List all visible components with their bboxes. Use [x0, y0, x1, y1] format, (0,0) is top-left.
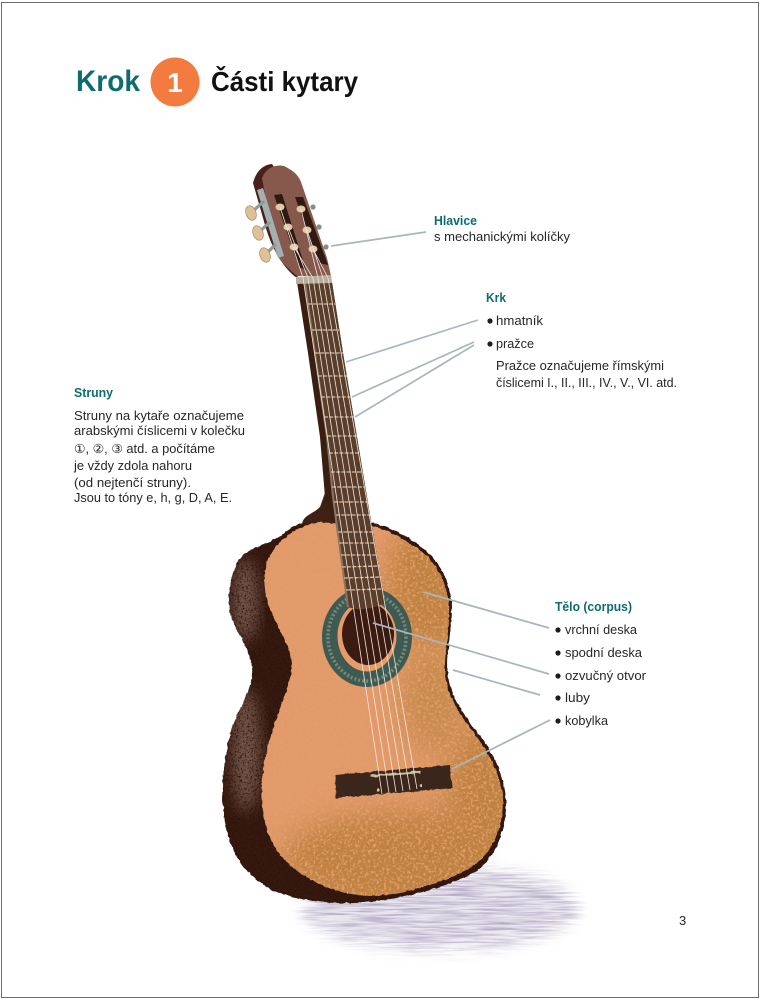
title	[76, 58, 358, 106]
label: Tělo (corpus): vrchní deska	[565, 623, 637, 637]
neck and fretboard	[297, 282, 385, 609]
tuning pegs	[244, 201, 329, 264]
guitar body	[222, 522, 507, 904]
step number badge	[150, 58, 200, 106]
label: Hlavice: Hlavice	[434, 214, 477, 228]
nut	[296, 275, 332, 284]
label: Tělo (corpus): Tělo (corpus)	[555, 600, 632, 614]
label: Krk: hmatník	[496, 314, 544, 328]
label: Struny: Jsou to tóny e, h, g, D, A, E.	[74, 491, 232, 505]
label: Krk	[486, 291, 677, 390]
label: Hlavice: s mechanickými kolíčky	[434, 230, 571, 244]
label: Struny: Struny na kytaře označujeme	[74, 409, 244, 423]
label: Struny: ①, ②, ③ atd. a počítáme	[74, 442, 215, 456]
label: Krk: Pražce označujeme římskými	[496, 359, 664, 373]
guitar illustration	[222, 164, 507, 904]
label: Struny	[73, 386, 245, 505]
label: Hlavice	[434, 214, 571, 244]
label: Struny: (od nejtenčí struny).	[74, 476, 191, 490]
strings	[280, 207, 417, 794]
title text: Části kytary: Části kytary	[211, 65, 358, 97]
body top	[261, 522, 504, 896]
label: Krk: Krk	[486, 291, 506, 305]
label: Krk: pražce	[496, 337, 534, 351]
label: Struny: je vždy zdola nahoru	[73, 459, 192, 473]
label: Tělo (corpus): luby	[565, 691, 591, 705]
leader lines	[331, 232, 550, 769]
label: Struny: Struny	[74, 386, 113, 400]
title word: Krok: Krok	[76, 65, 140, 98]
label: Tělo (corpus): ozvučný otvor	[565, 669, 646, 683]
sound hole rosette	[322, 587, 412, 687]
label: Struny: arabskými číslicemi v kolečku	[74, 424, 245, 438]
label: Tělo (corpus)	[555, 600, 646, 728]
headstock	[253, 164, 331, 278]
page number: 3	[679, 913, 686, 928]
step number badge: 1	[167, 67, 183, 98]
label: Tělo (corpus): spodní deska	[565, 646, 642, 660]
body sides	[215, 515, 515, 910]
label: Tělo (corpus): kobylka	[565, 714, 608, 728]
guitar shadow	[302, 866, 578, 950]
label: Krk: číslicemi I., II., III., IV., V., VI. atd.	[496, 376, 677, 390]
guitar heel	[302, 490, 345, 526]
bridge	[335, 765, 452, 798]
